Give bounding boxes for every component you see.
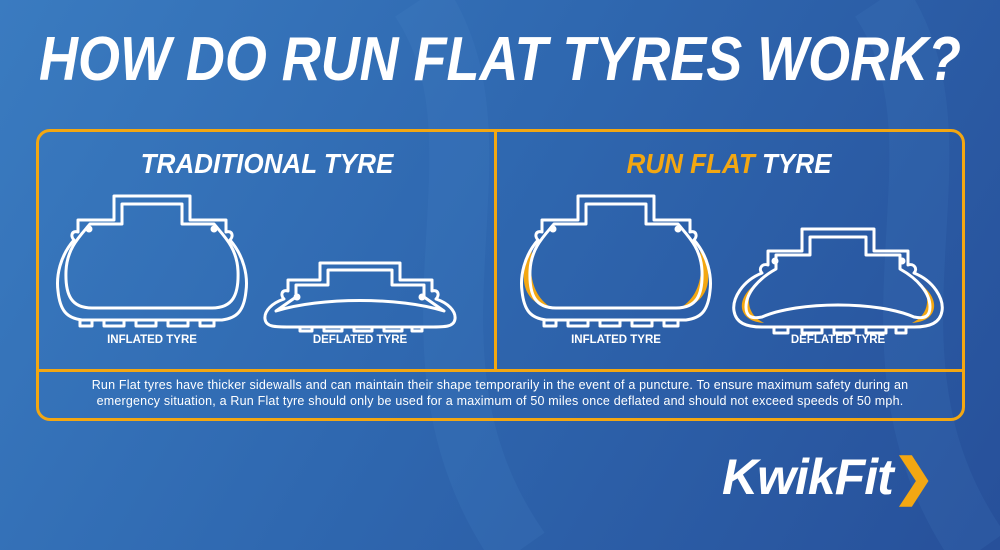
logo: Kwik Fit: KwikFit❯ (722, 449, 934, 505)
title: HOW DO RUN FLAT TYRES WORK? (39, 25, 961, 94)
caption text: emergency situation, a Run Flat tyre should only be used for a maximum of 50 miles once deflated and should not exceed speeds of 50 mph. (97, 394, 903, 408)
label: traditional inflated: INFLATED TYRE (107, 334, 197, 346)
panel: comparison frame (36, 129, 965, 421)
heading: traditional: TRADITIONAL TYRE (141, 148, 393, 179)
label: traditional deflated: DEFLATED TYRE (313, 334, 407, 346)
divider vertical (494, 132, 497, 369)
heading: run flat: RUN FLAT TYRE (627, 148, 831, 179)
icon: traditional inflated tyre (58, 196, 246, 326)
divider horizontal (39, 369, 962, 372)
caption text (92, 378, 908, 408)
background swirls (420, 0, 520, 550)
icon: traditional deflated tyre (265, 263, 455, 331)
label: run flat inflated: INFLATED TYRE (571, 334, 661, 346)
label: run flat deflated: DEFLATED TYRE (791, 334, 885, 346)
icon: run flat deflated tyre (734, 229, 942, 333)
caption text: Run Flat tyres have thicker sidewalls and can maintain their shape temporarily in the event of a puncture. To ensure maximum safety during an (92, 378, 908, 392)
icon: run flat inflated tyre (522, 196, 710, 326)
